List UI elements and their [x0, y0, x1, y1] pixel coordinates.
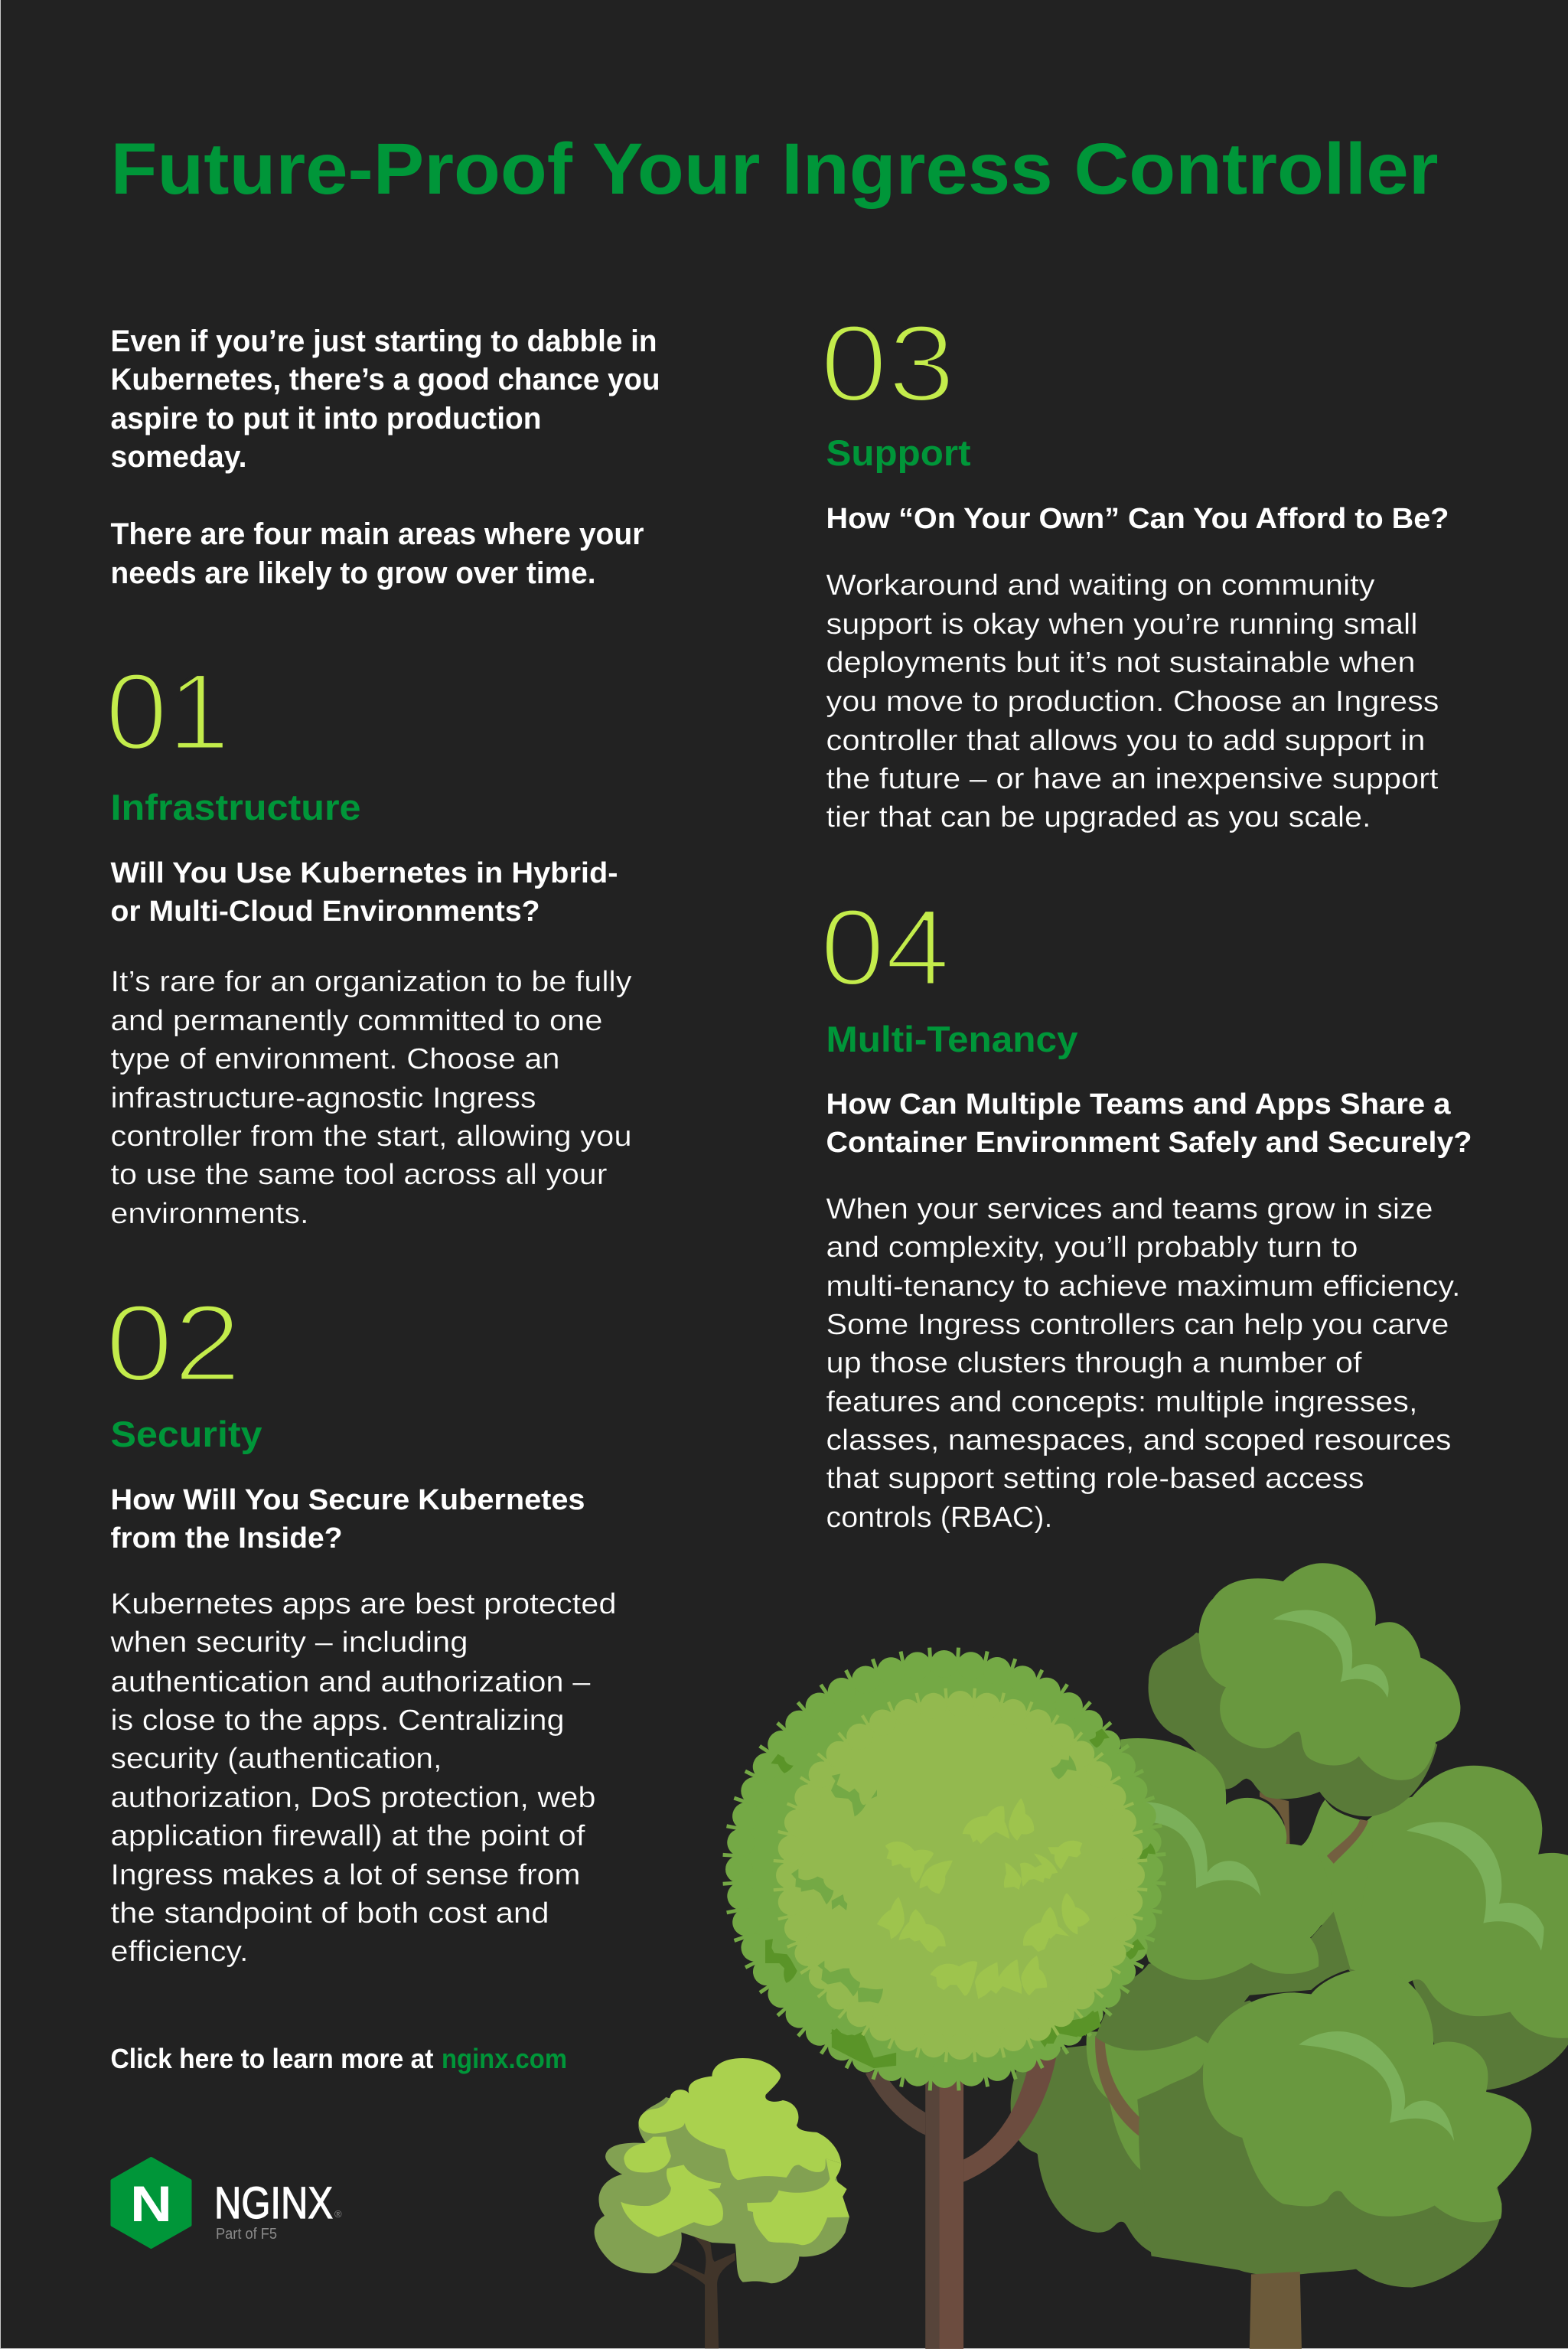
intro text block: Kubernetes, there’s a good chance you	[110, 363, 660, 396]
body text: up those clusters through a number of	[826, 1347, 1362, 1379]
question heading: or Multi-Cloud Environments?	[110, 896, 540, 928]
body text: that support setting role-based access	[826, 1463, 1364, 1495]
body text: security (authentication,	[110, 1743, 442, 1775]
part of F5: Part of F5	[216, 2226, 277, 2243]
body text: It’s rare for an organization to be fully	[110, 966, 632, 998]
question heading: from the Inside?	[110, 1522, 343, 1555]
question heading: Container Environment Safely and Securely?	[826, 1127, 1472, 1159]
question heading: Will You Use Kubernetes in Hybrid-	[110, 857, 618, 889]
bottom canopy back	[1011, 2001, 1502, 2287]
dark leaf accents	[765, 1728, 1156, 2044]
intro text block	[110, 325, 660, 590]
middle canopy	[1095, 1738, 1351, 2050]
question heading: How Can Multiple Teams and Apps Share a	[826, 1088, 1451, 1121]
intro text block: There are four main areas where your	[110, 517, 644, 551]
section label: Support	[826, 432, 971, 473]
body text: controller from the start, allowing you	[110, 1121, 631, 1153]
body text: you move to production. Choose an Ingress	[826, 686, 1439, 718]
section label: Security	[110, 1414, 262, 1454]
panel: 03 support	[820, 303, 1449, 834]
small tree back foliage	[595, 2097, 849, 2283]
panel: 04 multi-tenancy	[820, 887, 1472, 1534]
body text: is close to the apps. Centralizing	[110, 1705, 565, 1737]
body text	[826, 1193, 1460, 1534]
body text: when security – including	[109, 1626, 468, 1659]
inner shadow leaves	[791, 1755, 1077, 2004]
icon: green hexagon with N: N	[130, 2175, 172, 2232]
top canopy	[1149, 1563, 1460, 1933]
round tree trunk	[865, 2053, 1056, 2349]
illustration: large tree cluster, right	[865, 1563, 1568, 2349]
question heading: How Will You Secure Kubernetes	[110, 1484, 585, 1516]
section label: Infrastructure	[110, 787, 361, 827]
number 03: 03	[820, 303, 955, 425]
body text: classes, namespaces, and scoped resources	[826, 1424, 1451, 1457]
right canopy	[1328, 1766, 1568, 2090]
body text: and complexity, you’ll probably turn to	[826, 1232, 1358, 1264]
body text: controls (RBAC).	[826, 1502, 1053, 1534]
body text: features and concepts: multiple ingresses,	[826, 1386, 1417, 1418]
intro text block: needs are likely to grow over time.	[110, 556, 595, 590]
body text: authorization, DoS protection, web	[110, 1782, 595, 1814]
small tree light foliage	[621, 2058, 849, 2245]
body text: authentication and authorization –	[110, 1666, 591, 1698]
panel: 01 infrastructure	[106, 651, 632, 1230]
section label: Multi-Tenancy	[826, 1019, 1077, 1059]
body text: Ingress makes a lot of sense from	[110, 1859, 580, 1891]
body text: efficiency.	[110, 1936, 248, 1968]
question heading: How “On Your Own” Can You Afford to Be?	[826, 503, 1449, 535]
bottom dark accents	[832, 2011, 1101, 2068]
body text: controller that allows you to add support in	[826, 725, 1425, 757]
logo: NGINX	[112, 2158, 342, 2247]
panel: 02 security	[106, 1283, 617, 1968]
intro text block: Even if you’re just starting to dabble in	[110, 325, 657, 358]
icon: green hexagon with N	[112, 2158, 190, 2247]
intro text block: someday.	[110, 440, 246, 474]
body text: Workaround and waiting on community	[826, 569, 1374, 602]
body text: to use the same tool across all your	[110, 1159, 608, 1191]
title: Future-Proof Your Ingress Controller	[110, 129, 1439, 210]
illustration: round tree foliage	[728, 1652, 1161, 2086]
body text: infrastructure-agnostic Ingress	[110, 1082, 536, 1114]
outer foliage	[728, 1652, 1161, 2086]
body text: the standpoint of both cost and	[110, 1897, 549, 1930]
body text: the future – or have an inexpensive support	[826, 763, 1439, 795]
body text: multi-tenancy to achieve maximum efficiency.	[826, 1271, 1460, 1303]
question heading	[110, 1484, 585, 1555]
small tree trunk	[671, 2227, 735, 2348]
bottom canopy front	[1203, 1969, 1531, 2349]
body text	[109, 1588, 617, 1968]
body text: tier that can be upgraded as you scale.	[826, 801, 1371, 834]
body text: deployments but it’s not sustainable when	[826, 647, 1416, 679]
number 01: 01	[106, 651, 230, 773]
number 02: 02	[106, 1283, 242, 1405]
light leaves	[877, 1798, 1090, 1999]
body text: and permanently committed to one	[110, 1005, 602, 1037]
body text	[110, 966, 632, 1230]
body text: When your services and teams grow in size	[826, 1193, 1433, 1225]
inner foliage	[778, 1693, 1143, 2057]
body text: environments.	[110, 1198, 309, 1230]
number 04: 04	[820, 887, 950, 1009]
question heading	[110, 857, 618, 928]
body text: support is okay when you’re running small	[826, 608, 1417, 641]
body text: type of environment. Choose an	[110, 1043, 560, 1075]
call to action link: Click here to learn more at	[110, 2043, 434, 2074]
call to action link: nginx.com	[442, 2043, 567, 2074]
wordmark: NGINX	[214, 2178, 333, 2228]
body text: Some Ingress controllers can help you carve	[826, 1309, 1449, 1341]
body text: application firewall) at the point of	[110, 1820, 585, 1852]
question heading	[826, 1088, 1472, 1159]
illustration: small tree	[595, 2058, 849, 2348]
body text: Kubernetes apps are best protected	[110, 1588, 617, 1620]
registered mark: ®	[334, 2208, 342, 2220]
intro text block: aspire to put it into production	[110, 402, 542, 436]
body text	[826, 569, 1439, 834]
